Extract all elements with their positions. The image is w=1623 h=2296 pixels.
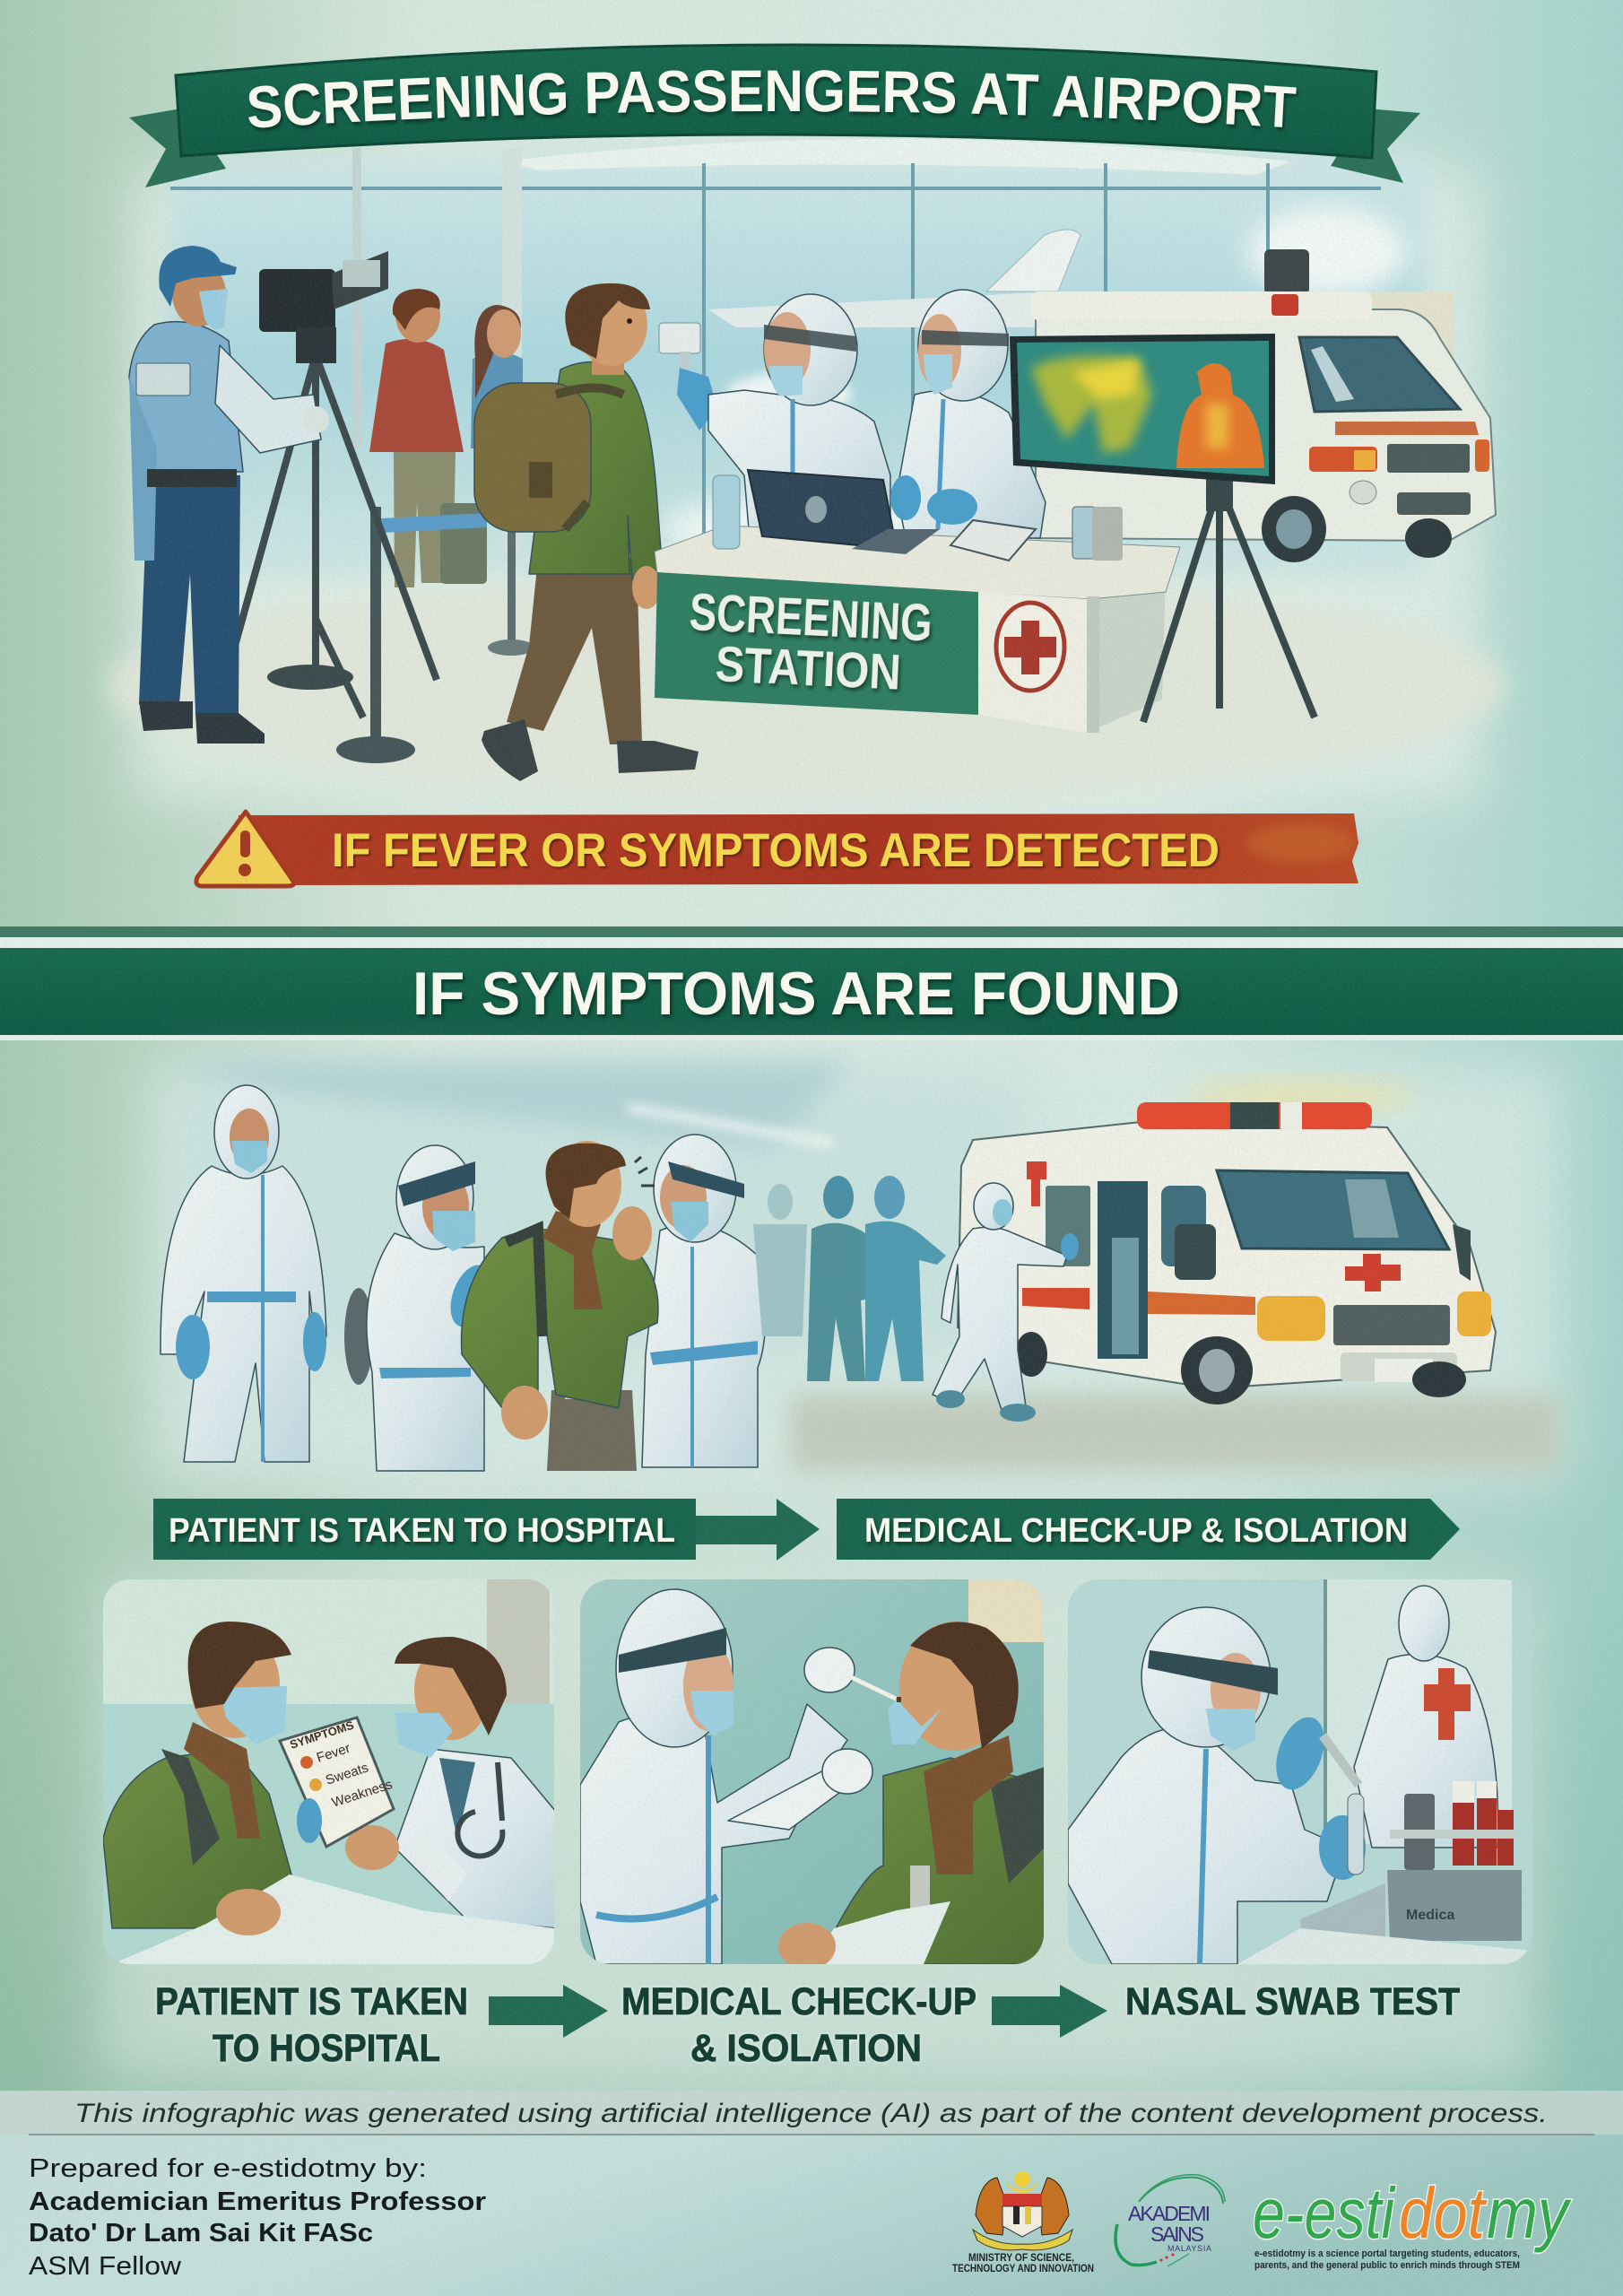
alert text: IF FEVER OR SYMPTOMS ARE DETECTED — [332, 824, 1219, 877]
arrow one — [489, 1985, 608, 2038]
infrared thermometer — [659, 323, 717, 430]
caption: medical check-up and isolation: MEDICAL CHECK-UP — [621, 1980, 976, 2023]
logo: ministry of science, technology and innovation: TECHNOLOGY AND INNOVATION — [952, 2262, 1094, 2274]
icon: national crest — [973, 2171, 1072, 2250]
doctor in white coat — [345, 1637, 556, 1928]
patient hand — [216, 1889, 281, 1935]
author credits: Dato' Dr Lam Sai Kit FASc — [29, 2219, 373, 2248]
caption: medical check-up and isolation — [621, 1980, 976, 2070]
worker on patient's far side — [642, 1135, 766, 1467]
floor — [108, 574, 1506, 798]
lab analyser: Medica — [1406, 1908, 1454, 1923]
footer panel — [0, 2091, 1623, 2296]
section header band — [0, 948, 1623, 1040]
screening station label: STATION — [714, 635, 902, 700]
hazy terminal background — [161, 1063, 1560, 1471]
symptoms clipboard — [280, 1718, 395, 1847]
security officer — [129, 246, 329, 744]
symptoms clipboard: SYMPTOMS — [288, 1718, 356, 1752]
desk items: laptop, bottles, tablet — [713, 470, 1123, 561]
symptoms clipboard: Sweats — [324, 1760, 370, 1788]
symptoms clipboard: Weakness — [330, 1777, 395, 1811]
caption: patient is taken to hospital: TO HOSPITAL — [213, 2027, 440, 2070]
main passenger with backpack — [474, 283, 699, 781]
hospital bed — [112, 1874, 554, 1964]
section divider stripe — [0, 926, 1623, 948]
background lab worker with red cross — [1354, 1586, 1498, 1848]
worker taking swab — [580, 1589, 872, 1964]
foreground lab worker — [1068, 1607, 1366, 1964]
step label: medical check-up and isolation — [837, 1499, 1460, 1560]
scene: patient escorted to ambulance — [161, 1063, 1560, 1471]
AI disclaimer: This infographic was generated using artificial intelligence (AI) as part of the content development process. — [74, 2099, 1548, 2128]
test tubes — [1323, 1735, 1515, 1874]
background passenger in red jacket — [369, 289, 487, 587]
panel: patient with doctor — [103, 1579, 556, 1964]
ambulance behind the station — [1031, 249, 1496, 562]
alert banner: fever or symptoms — [196, 812, 1358, 886]
camera on tripod — [235, 251, 437, 718]
panel: sample testing — [1068, 1579, 1532, 1964]
section heading: IF SYMPTOMS ARE FOUND — [412, 960, 1180, 1028]
thermal imaging monitor — [1010, 334, 1315, 722]
symptoms clipboard: Fever — [315, 1741, 352, 1766]
screening station label: SCREENING — [688, 583, 933, 653]
patient receiving swab — [778, 1622, 1045, 1970]
arrow two — [992, 1985, 1107, 2038]
logo: e-estidotmy: e-estidotmy is a science portal targeting students, educators, — [1254, 2248, 1520, 2259]
screening worker two — [890, 290, 1046, 538]
caption: patient is taken to hospital — [155, 1980, 468, 2070]
logo: e-estidotmy: e-esti — [1253, 2173, 1396, 2253]
logo: ministry of science, technology and innovation: MINISTRY OF SCIENCE, — [968, 2251, 1074, 2264]
logo: e-estidotmy: parents, and the general public to enrich minds through STEM — [1254, 2260, 1520, 2271]
caption: patient is taken to hospital: PATIENT IS TAKEN — [155, 1980, 468, 2023]
logo: e-estidotmy: my — [1487, 2173, 1572, 2253]
logo: akademi sains malaysia: AKADEMI — [1128, 2202, 1211, 2225]
staff walking beside ambulance — [933, 1183, 1079, 1422]
warning triangle icon — [196, 812, 294, 886]
arrow between step labels — [696, 1499, 820, 1561]
screening desk — [655, 526, 1180, 733]
logo: akademi sains malaysia: SAINS — [1150, 2222, 1204, 2246]
step label: medical check-up and isolation: MEDICAL CHECK-UP & ISOLATION — [864, 1512, 1408, 1550]
author credits — [29, 2154, 486, 2281]
logo: akademi sains malaysia: MALAYSIA — [1167, 2244, 1211, 2253]
logo: e-estidotmy — [1253, 2173, 1572, 2271]
coughing patient — [462, 1141, 658, 1471]
caption: medical check-up and isolation: & ISOLATION — [690, 2027, 922, 2070]
title text: SCREENING PASSENGERS AT AIRPORT — [248, 70, 1299, 133]
step label: patient is taken to hospital — [153, 1499, 696, 1560]
author credits: ASM Fellow — [29, 2252, 182, 2281]
lab analyser — [1300, 1870, 1522, 1946]
terminal windows and sky — [170, 139, 1426, 578]
queue stanchions — [336, 507, 534, 763]
panel: nasal swab — [580, 1579, 1045, 1970]
screening worker one — [708, 294, 890, 529]
ambulance with open door — [958, 1080, 1496, 1405]
author credits: Academician Emeritus Professor — [29, 2187, 486, 2216]
logo: e-estidotmy: dot — [1399, 2173, 1487, 2253]
screening station label — [688, 583, 933, 700]
red cross emblem — [996, 603, 1064, 691]
title ribbon — [129, 43, 1420, 187]
logo: akademi sains malaysia — [1115, 2175, 1225, 2266]
swab stick — [847, 1675, 896, 1699]
worker holding patient — [344, 1145, 499, 1471]
lab bench — [1237, 1928, 1532, 1964]
scene: airport screening illustration — [108, 139, 1506, 798]
author credits: Prepared for e-estidotmy by: — [29, 2154, 427, 2183]
background passenger in blue top — [471, 305, 523, 448]
distant staff in teal — [753, 1176, 946, 1381]
caption: nasal swab test: NASAL SWAB TEST — [1125, 1980, 1460, 2023]
logo: ministry of science, technology and innovation — [952, 2171, 1094, 2274]
worker standing left — [161, 1085, 326, 1462]
step label: patient is taken to hospital: PATIENT IS TAKEN TO HOSPITAL — [169, 1512, 675, 1550]
patient in bed — [103, 1622, 291, 1928]
